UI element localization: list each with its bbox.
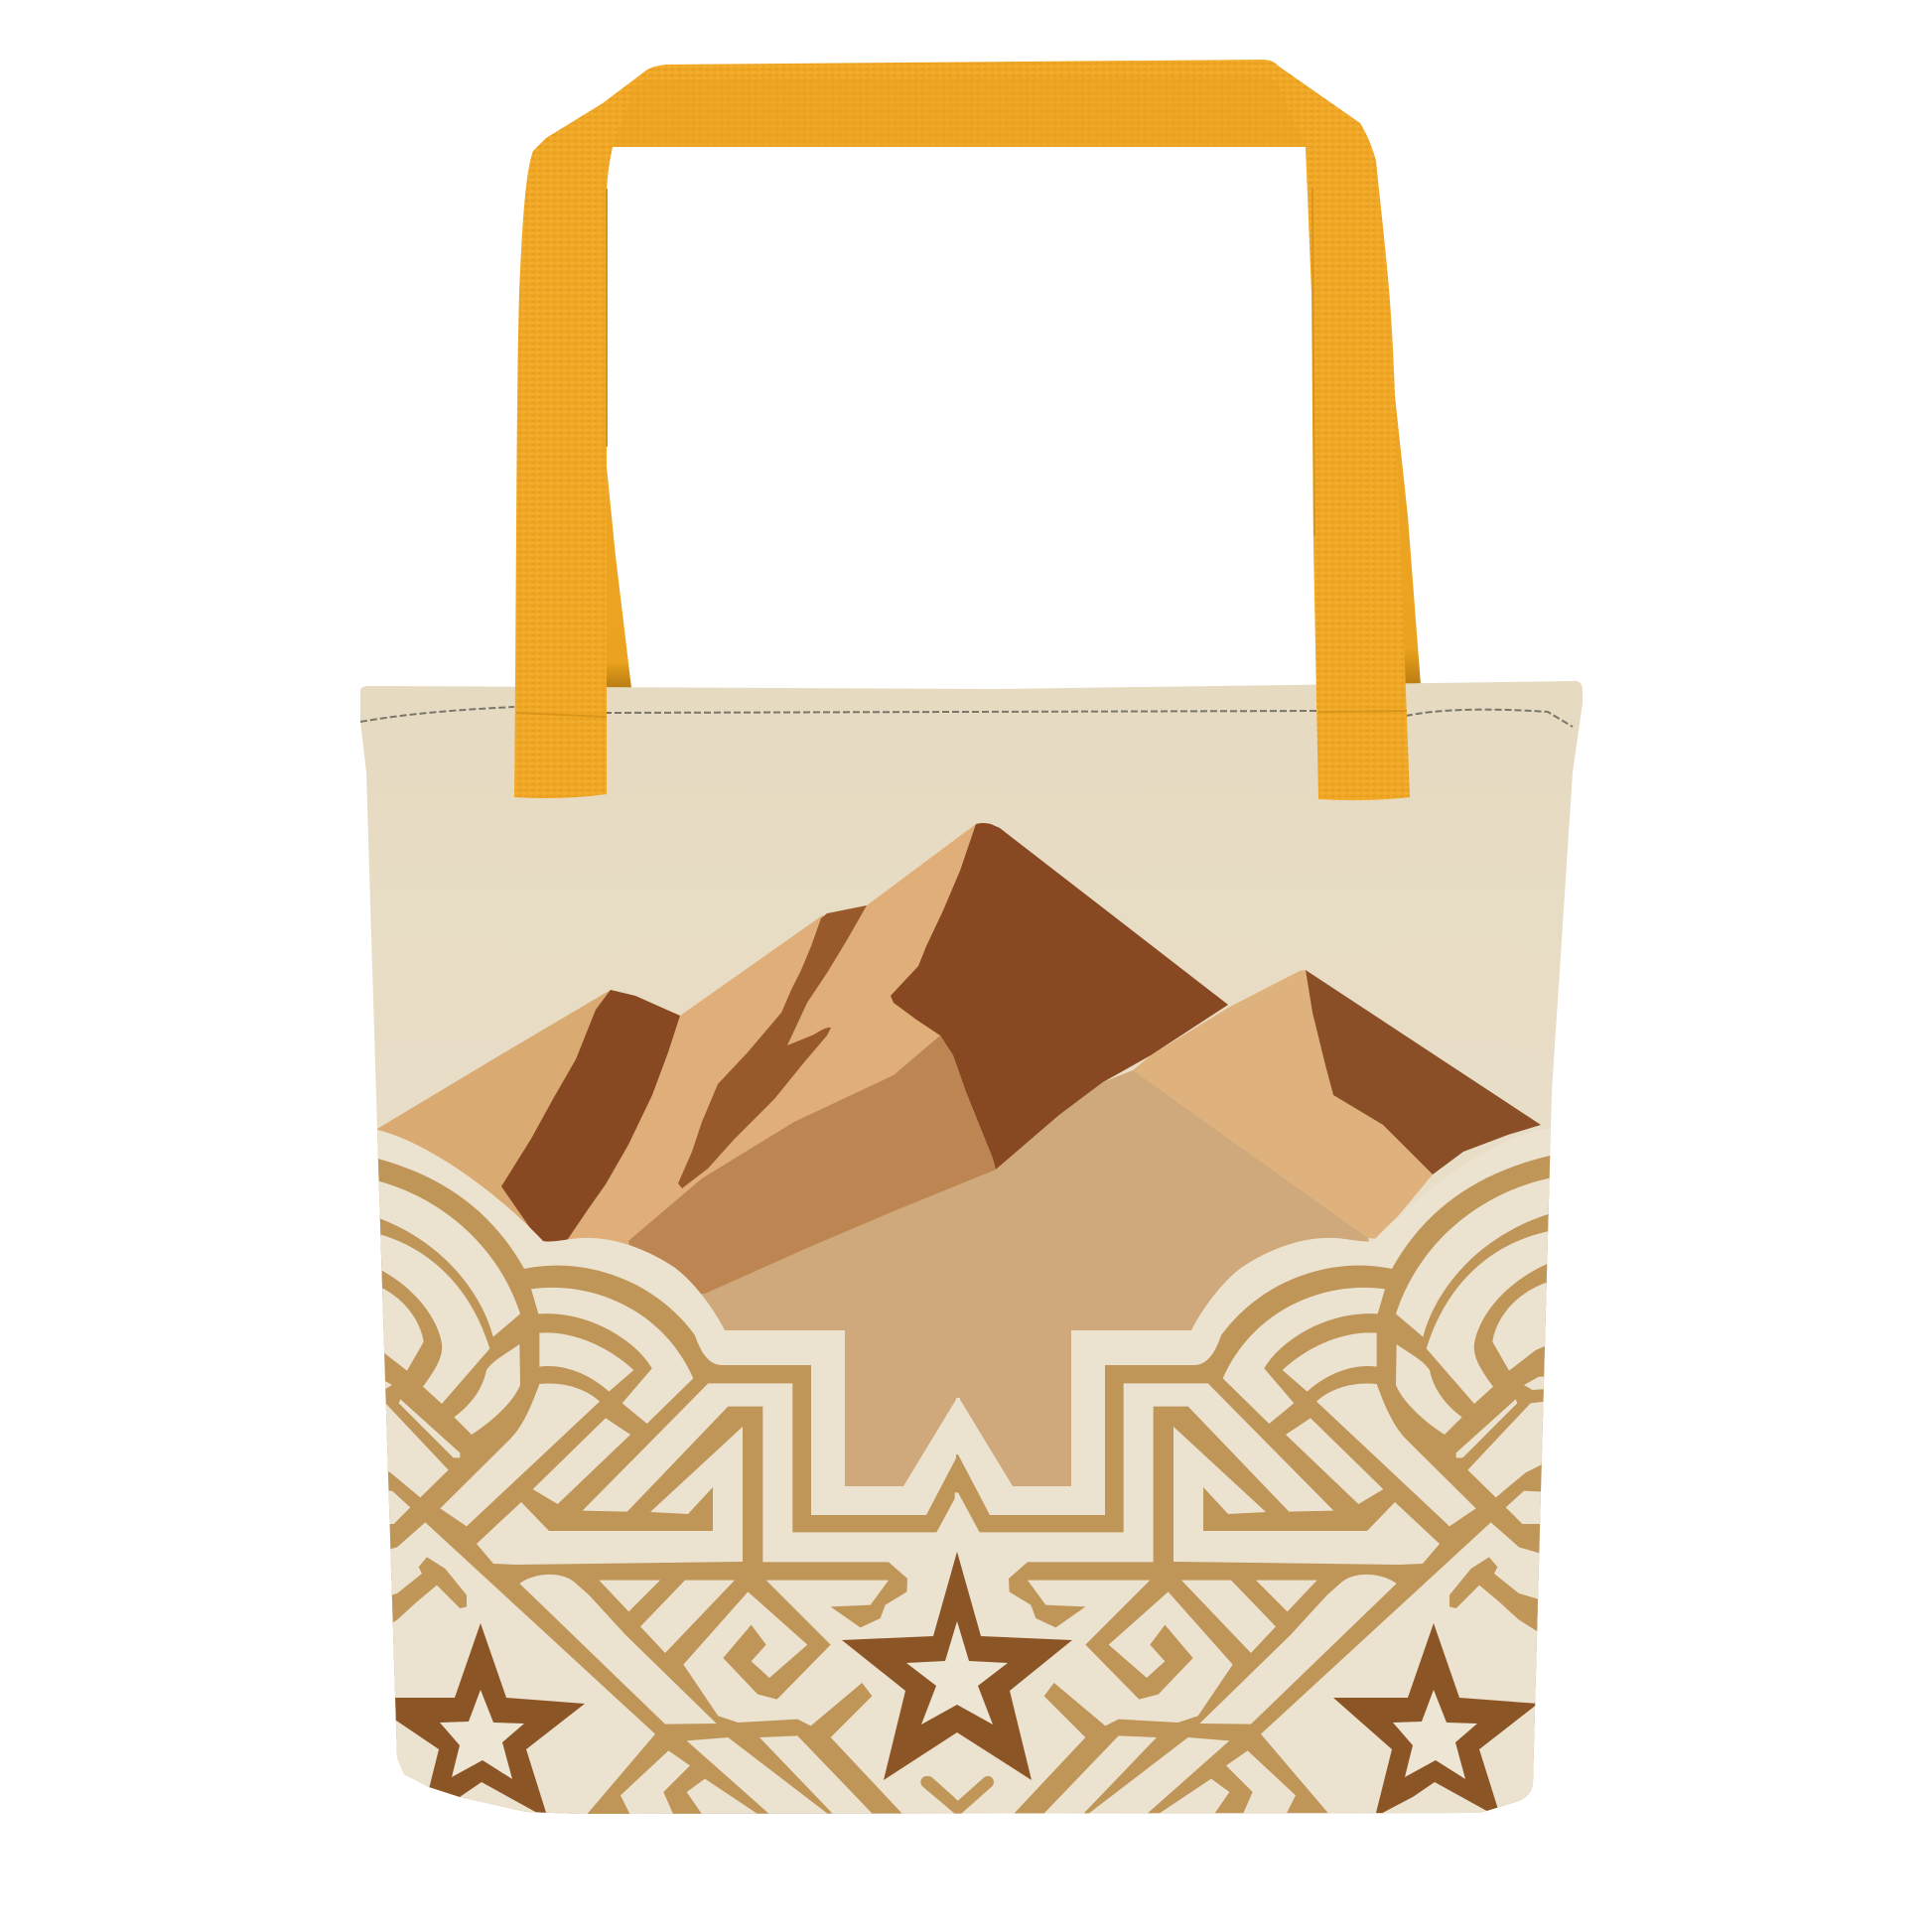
main peak shadow face — [891, 823, 1228, 1170]
handle strap — [514, 60, 1410, 800]
left half of knot pattern — [347, 1126, 990, 1854]
middle peak brown slope — [628, 1035, 996, 1311]
mirrored right half of knot pattern — [926, 1126, 1569, 1854]
mountains — [362, 823, 1541, 1509]
cream ground above knot — [352, 1126, 960, 1847]
center star — [842, 1552, 1072, 1780]
lower cream cells — [599, 1581, 877, 1819]
strap stitching — [516, 189, 1407, 717]
lower left cream cells — [357, 1491, 717, 1824]
printed artwork — [347, 823, 1569, 1854]
middle peak crevice — [678, 905, 867, 1188]
back handle straps — [607, 377, 1421, 688]
inner top band — [613, 75, 1306, 147]
left peak shadow face — [501, 990, 680, 1251]
right peak shadow face — [1306, 970, 1541, 1174]
right peak light face — [1133, 970, 1433, 1239]
left star — [395, 1623, 585, 1813]
knot line ground — [347, 1152, 960, 1847]
central cream region and wedge — [583, 1383, 961, 1854]
front sand slope — [695, 1070, 1390, 1509]
front handle — [514, 60, 1410, 800]
upper cream cells — [357, 1176, 693, 1526]
tote bag illustration — [359, 60, 1583, 1814]
left peak light face — [377, 990, 611, 1286]
middle peak light face — [576, 824, 976, 1245]
bag body — [360, 681, 1583, 1814]
corner stub — [357, 1557, 467, 1645]
triangle base cell — [477, 1427, 743, 1565]
top hem stitching — [360, 707, 1573, 727]
bottom chevron — [928, 1782, 990, 1809]
right star — [1333, 1623, 1538, 1819]
